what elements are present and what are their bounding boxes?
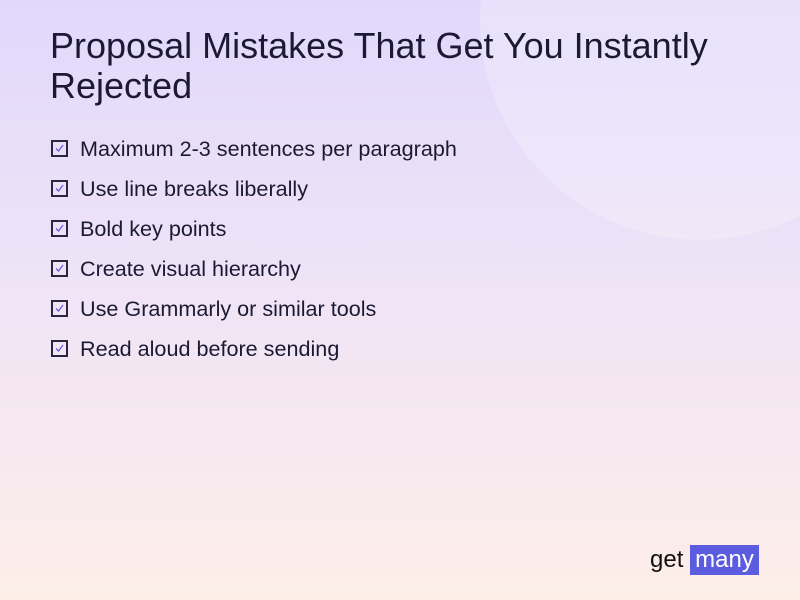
- item 1: [51, 136, 457, 161]
- title: Proposal Mistakes That Get You Instantly Rejected: [50, 25, 708, 106]
- checklist: Bold key points: [80, 216, 226, 241]
- checklist: [51, 136, 457, 361]
- logo: [650, 545, 759, 575]
- checklist: Use line breaks liberally: [80, 176, 308, 201]
- checklist: Maximum 2-3 sentences per paragraph: [80, 136, 457, 161]
- checklist: Use Grammarly or similar tools: [80, 296, 376, 321]
- checklist: Create visual hierarchy: [80, 256, 301, 281]
- item 2: [51, 176, 308, 201]
- logo: many: [695, 546, 754, 573]
- item 3: [51, 216, 226, 241]
- logo: get: [650, 546, 683, 573]
- item 6: [51, 336, 339, 361]
- item 5: [51, 296, 376, 321]
- item 4: [51, 256, 301, 281]
- checklist: Read aloud before sending: [80, 336, 339, 361]
